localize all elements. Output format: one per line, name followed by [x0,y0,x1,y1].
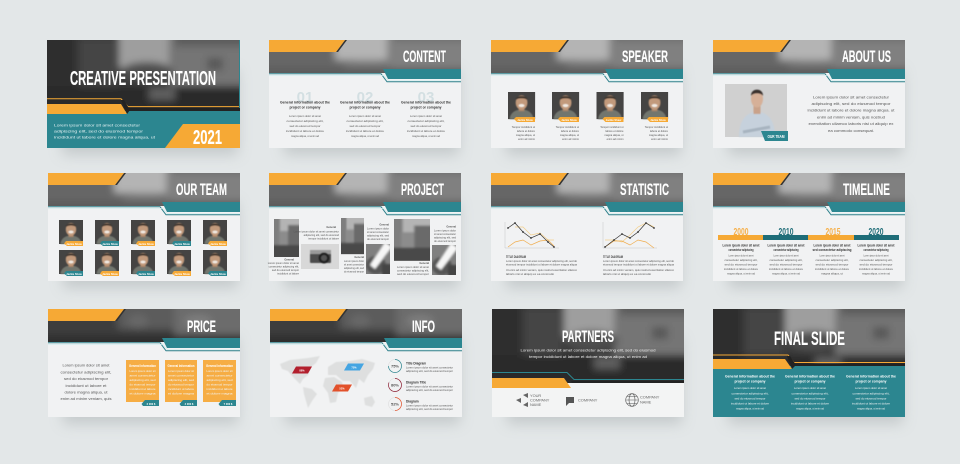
timeline column 4: consectetur adipiscing elit, [860,258,893,262]
project notes: sit amet consectetur [344,262,364,266]
timeline column 4: Lorem ipsum dolor sit amet [864,254,889,258]
column 2: General information about the [340,100,390,104]
diagram 3 [388,398,453,411]
price card 2: adipiscing elit, sed [168,378,194,382]
project notes: General [379,222,389,226]
about text: Lorem ipsum dolor sit amet consectetur [813,94,890,100]
speaker 3: enim ad minim [607,137,624,141]
price card 3: Lorem ipsum dolor sit [206,369,233,373]
team row 1: Jackie Shaw [102,242,119,246]
project notes: Lorem ipsum dolor sit amet [397,265,429,269]
street photo 1 [271,216,302,260]
column 2: magna aliqua, ut enim ad [796,406,824,410]
chart 2 caption: Lorem ipsum dolor sit amet consectetur adipiscing elit, sed do [603,259,674,263]
speaker 1 [508,92,536,141]
project notes: sed do eiusmod tempor [397,272,429,276]
diagram 3: Lorem ipsum dolor sit amet consectetur [406,404,453,408]
column 3: 03 [418,89,434,106]
column 2: Lorem ipsum dolor sit amet [349,114,381,118]
column 1: project or company [290,106,321,110]
price card 3: adipiscing elit, sed [206,378,233,382]
diagram 1: adipiscing elit, sed do eiusmod tempor [406,369,453,373]
chart 2 caption: TITLE DIAGRAM [603,255,623,259]
column 1: Lorem ipsum dolor sit amet [734,386,766,390]
project notes: adipiscing elit, sed [434,236,457,240]
heading: INFO [412,317,435,336]
price card 1: et dolore magna [130,392,156,396]
intro text: Lorem ipsum dolor sit amet consectetur adipiscing elit, sed do eiusmod [520,347,656,352]
team row 1: Jackie Shaw [174,242,191,246]
timeline column 3: sed do eiusmod tempor [816,262,849,266]
timeline column 4: magna aliqua, ut enim ad [862,272,890,276]
hand photo 1 [366,242,392,276]
world map [280,356,375,408]
timeline column 4: sed do eiusmod tempor [860,262,893,266]
price card 1: adipiscing elit, sed [130,378,156,382]
project notes: incididunt ut labore [277,272,300,276]
price text: Lorem ipsum dolor sit amet [62,362,110,368]
speaker 4: magna aliqua, ut [649,133,668,137]
column 1: consectetur adipiscing elit, [732,392,769,396]
chart 1 caption: TITLE DIAGRAM [506,255,526,259]
team row 2: Jackie Shaw [210,272,227,276]
speaker 4: Tempor incididunt ut [645,125,668,129]
team row 2 [59,250,227,276]
project notes [268,222,457,276]
speaker 4: Jackie Shaw [650,118,667,122]
project notes: do eiusmod tempor [344,270,364,274]
timeline column 2: Lorem ipsum dolor sit amet [774,254,799,258]
column 3: sed do eiusmod tempor [410,124,442,128]
about text: exercitation ullamco laboris nisi ut aliquip ex [808,121,894,126]
intro text: incididunt ut labore et dolore magna aliqua, ut [54,134,156,140]
price card 1: do eiusmod tempor [130,382,156,386]
slide: final slide [713,309,905,417]
about text: incididunt ut labore et dolore magna aliqua. ut [808,108,895,112]
column 2: magna aliqua, ut enim ad [351,134,379,138]
heading: FINAL SLIDE [774,329,845,350]
price card 2: et dolore magna [168,392,194,396]
chart 2 caption [603,255,675,276]
timeline column 3: sed consectetur adipiscing [812,248,852,252]
heading: PRICE [187,317,216,336]
timeline column 4: Lorem ipsum dolor sit amet [858,244,895,248]
column 3: consectetur adipiscing elit, [852,392,890,396]
price text: consectetur adipiscing elit, [60,370,112,374]
map tag 75%: 75% [351,365,357,369]
price text: dolore magna aliqua, ut [64,390,108,394]
column 2: consectetur adipiscing elit, [346,119,384,123]
speaker 2: labore et dolore [561,129,580,133]
line chart 2 [603,222,657,248]
team row 2: Jackie Shaw [138,272,155,276]
intro text [520,347,656,359]
price card 3: 7 000 $ [224,402,233,406]
partner logo 1: NAME [530,402,542,407]
year badge: 2021 [193,127,222,149]
team row 1: Jackie Shaw [210,242,227,246]
diagram 3: Diagram [406,400,419,404]
price card 1: amet consectetur [130,374,156,378]
column 2: sed do eiusmod tempor [350,124,381,128]
diagram 1 [388,360,453,373]
project notes: do eiusmod tempor [434,239,456,243]
column 1 [280,89,330,138]
speaker 3: Tempor incididunt ut [600,125,624,129]
chart 1 caption: laboris nisi ut aliquip ex ea commodo [506,272,555,276]
column 1: magna aliqua, ut enim ad [291,134,319,138]
project notes: Lorem ipsum dolor sit amet [268,261,299,265]
speaker 1: labore et dolore [517,129,536,133]
slide: statistic [491,173,683,281]
column 2 [340,89,390,138]
price text [60,362,112,401]
slide: creative presentation cover [47,40,240,148]
column 2: Lorem ipsum dolor sit amet [794,386,826,390]
column 3: General information about the [846,374,896,378]
column 1: project or company [734,380,766,384]
column 3: project or company [410,106,442,110]
slide: our team [48,173,240,281]
timeline column 1: incididunt ut labore et dolore [724,267,758,271]
timeline column 4 [858,244,895,276]
team row 1: Jackie Shaw [66,242,83,246]
line chart 1 [505,222,559,248]
timeline column 3: Lorem ipsum dolor sit amet [820,254,845,258]
chart 2 caption: eiusmod tempor incididunt ut labore et dolore magna aliqua [603,262,675,266]
price card 3: amet consectetur [206,374,233,378]
heading: CONTENT [403,47,446,66]
column 3: consectetur adipiscing elit, [408,119,445,123]
column 3: General information about the [401,100,451,104]
about text: ea commodo consequat. [828,128,874,133]
column 2: project or company [794,380,826,384]
column 1: magna aliqua, ut enim ad [736,406,764,410]
slide: project [268,173,461,281]
heading: ABOUT US [842,47,891,66]
partner logo 3 [626,394,660,406]
partner logo 3: COMPANY [640,394,660,400]
diagram 1: Title Diagram [406,362,426,366]
timeline column 2: incididunt ut labore et dolore [769,267,803,271]
intro text: tempor incididunt ut labore et dolore magna aliqua, ut enim ad [529,354,647,359]
heading: TIMELINE [843,180,890,199]
speaker 4 [641,92,669,141]
partner logo 1: COMPANY [530,398,550,402]
speaker 3: magna aliqua, ut [604,133,624,137]
column 2: General information about the [785,374,835,378]
price card 2: amet consectetur [168,374,194,378]
slide: info [270,309,462,417]
column 2: 02 [357,89,373,106]
price card 2: 4 000 $ [185,402,194,406]
timeline bar: 2000 [734,227,749,238]
slide: partners [492,309,684,417]
diagram 3: 52% [391,401,399,406]
street photo 3 [390,216,434,264]
speaker 2: enim ad minim [562,137,579,141]
project notes: Lorem ipsum dolor [434,228,456,232]
diagram 3: adipiscing elit, sed do eiusmod tempor [406,407,453,411]
street photo 2 [338,215,367,257]
project notes: adipiscing elit, sed [367,234,390,238]
slide: price [48,309,240,417]
timeline column 2: consectetur adipiscing elit, [770,258,803,262]
column 1: consectetur adipiscing elit, [286,119,324,123]
column 2 [785,374,835,410]
project notes: adipiscing elit, sed [344,266,365,270]
chart 1 caption [506,255,578,276]
about text: enim ad minim veniam, quis nostrud [817,114,885,120]
column 1 [725,374,775,410]
speaker 2 [552,92,580,141]
price text: incididunt ut labore et [66,383,107,388]
timeline bar [718,227,899,240]
price card 2: Lorem ipsum dolor sit [168,369,194,373]
project notes: consectetur adipiscing elit, [269,264,299,268]
column 1: sed do eiusmod tempor [734,396,766,400]
slide: timeline [713,173,905,281]
project notes: Lorem ipsum dolor [367,226,389,230]
price card 1: Lorem ipsum dolor sit [130,369,156,373]
team row 2: Jackie Shaw [66,272,83,276]
price card 1: General Information [129,364,156,368]
team row 1: Jackie Shaw [138,242,155,246]
about text: adipiscing elit, sed do eiusmod tempor [812,101,891,106]
price card 3: et dolore magna [206,392,233,396]
project notes: sed do eiusmod tempor [272,268,299,272]
diagram 2: Lorem ipsum dolor sit amet consectetur [406,384,453,388]
column 1: 01 [297,89,313,106]
price text: sed do eiusmod tempor [64,376,109,381]
column 1: incididunt ut labore et dolore [731,402,769,406]
slide: content [269,40,461,148]
project notes: General [326,225,336,229]
column 3 [401,89,451,138]
column 3: magna aliqua, ut enim ad [412,134,440,138]
partner logo 1: YOUR [530,393,541,398]
speaker 1: magna aliqua, ut [516,133,535,137]
speaker 1: enim ad minim [518,137,535,141]
timeline column 2: consectetur adipiscing [774,248,798,252]
column 2: incididunt ut labore et dolore [791,402,829,406]
price card 2: incididunt ut labore [168,387,194,391]
camera photo [301,244,339,269]
price card 1 [126,360,159,406]
intro text: adipiscing elit, sed do eiusmod tempor [54,128,144,134]
title: CREATIVE PRESENTATION [70,68,216,90]
speaker 1: Jackie Shaw [517,118,534,122]
column 1: General information about the [725,374,775,378]
column 3: incididunt ut labore et dolore [852,402,890,406]
timeline column 3 [812,244,852,276]
price card 2: do eiusmod tempor [168,382,194,386]
timeline column 3: incididunt ut labore et dolore [815,267,849,271]
speaker 1: Tempor incididunt ut [512,125,535,129]
timeline column 2: magna aliqua, ut enim ad [772,272,800,276]
heading: PARTNERS [562,327,614,346]
price card 3: do eiusmod tempor [206,382,233,386]
column 2: sed do eiusmod tempor [794,396,826,400]
diagram 1: 75% [391,363,399,368]
project notes: Lorem ipsum dolor sit amet consectetur [294,230,339,234]
timeline column 1: magna aliqua, ut enim ad [727,272,755,276]
timeline column 1: Lorem ipsum dolor sit amet [722,244,760,248]
timeline bar: 2010 [778,227,794,238]
column 2: project or company [350,106,381,110]
about text [808,94,895,133]
speaker 4: labore et dolore [650,129,669,133]
timeline bar: 2020 [868,227,884,238]
price card 1: incididunt ut labore [130,387,156,391]
diagram 2: adipiscing elit, sed do eiusmod tempor [406,388,453,392]
slide: speaker [491,40,683,148]
column 2: incididunt ut labore et dolore [346,129,384,133]
project notes: General [446,224,456,228]
slide: about us [713,40,905,148]
timeline column 3: Lorem ipsum dolor sit amet [814,244,851,248]
map tag 52% [332,384,352,392]
heading: STATISTIC [620,180,669,199]
team row 1 [59,220,227,246]
speaker 2: Jackie Shaw [561,118,578,122]
project notes: tempor incididunt ut labore [308,236,340,240]
column 3: incididunt ut labore et dolore [407,129,445,133]
timeline column 1: sed do eiusmod tempor [724,262,758,266]
price card 3: General Information [206,364,233,368]
column 3: magna aliqua, ut enim ad [857,406,885,410]
project notes: adipiscing elit, sed do eiusmod [304,233,340,237]
column 1: General information about the [280,100,330,104]
chart 1 caption: eiusmod tempor incididunt ut labore et dolore magna aliqua [506,262,578,266]
price card 2 [165,360,197,406]
column 2: consectetur adipiscing elit, [792,392,829,396]
heading: PROJECT [401,180,444,199]
timeline column 1: Lorem ipsum dolor sit amet [728,254,754,258]
map tag 88%: 88% [299,368,305,372]
timeline column 1 [722,244,760,276]
column 3: project or company [856,380,887,384]
project notes: General [284,258,294,262]
intro text: Lorem ipsum dolor sit amet consectetur [54,122,141,128]
speaker 4: enim ad minim [651,137,668,141]
map tag 75% [344,364,364,370]
price card 2: General Information [168,364,194,368]
timeline column 1: consectetur adipiscing elit, [724,258,758,262]
diagram 2 [388,378,453,392]
timeline column 4: incididunt ut labore et dolore [859,267,893,271]
project notes: General [354,255,364,259]
speaker 3: labore et dolore [605,129,624,133]
timeline column 2: sed do eiusmod tempor [770,262,803,266]
project notes: sit amet consectetur [434,232,456,236]
chart 2 caption: laboris nisi ut aliquip ex ea commodo [603,272,652,276]
diagram 1: Lorem ipsum dolor sit amet consectetur [406,366,453,370]
column 3: sed do eiusmod tempor [856,396,887,400]
project notes: Lorem ipsum dolor [344,259,364,263]
caption tag: OUR TEAM [768,134,785,139]
speaker 2: magna aliqua, ut [560,133,579,137]
speaker 3: Jackie Shaw [606,118,622,122]
diagram 2: 80% [391,382,399,387]
portrait photo [725,84,788,141]
price text: enim ad minim veniam, quis [60,396,112,401]
intro text [54,122,156,140]
project notes: General [419,261,429,265]
partner logo 1 [516,393,550,407]
map tag 88% [292,366,312,374]
price card 3: incididunt ut labore [206,387,233,391]
team row 2: Jackie Shaw [102,272,119,276]
partner logo 2: COMPANY [578,398,598,402]
timeline column 4: consectetur adipiscing [864,248,888,252]
chart 2 caption: Ut enim ad minim veniam, quis nostrud exercitation ullamco [603,268,675,272]
timeline column 3: magna aliqua, ut [821,272,843,276]
timeline column 3: consectetur adipiscing elit, [816,258,849,262]
speaker 2: Tempor incididunt ut [556,125,579,129]
timeline column 2 [768,244,805,276]
column 1: Lorem ipsum dolor sit amet [289,114,321,118]
team row 2: Jackie Shaw [174,272,191,276]
map tag 52%: 52% [339,386,345,390]
column 3 [846,374,896,410]
heading: SPEAKER [622,47,668,66]
chart 1 caption: Ut enim ad minim veniam, quis nostrud exercitation ullamco [506,268,578,272]
hand photo 2 [432,243,458,277]
price card 3 [203,360,236,406]
project notes: sit amet consectetur [367,230,389,234]
partner logo 3: NAME [640,400,652,404]
timeline column 2: Lorem ipsum dolor sit amet [768,244,805,248]
heading: OUR TEAM [176,180,227,199]
timeline bar: 2015 [826,227,841,238]
speaker 3 [596,92,624,141]
project notes: do eiusmod tempor [367,237,389,241]
column 3: Lorem ipsum dolor sit amet [855,386,887,390]
diagram 2: Diagram Title [406,380,426,384]
project notes: consectetur adipiscing elit, [397,268,429,272]
timeline column 1: consectetur adipiscing [728,248,754,252]
chart 1 caption: Lorem ipsum dolor sit amet consectetur adipiscing elit, sed do [506,259,577,263]
column 3: Lorem ipsum dolor sit amet [410,114,442,118]
column 1: sed do eiusmod tempor [290,124,321,128]
partner logo 2 [566,397,598,406]
column 1: incididunt ut labore et dolore [286,129,324,133]
price card 1: 2 000 $ [147,402,156,406]
year badge [165,124,240,149]
